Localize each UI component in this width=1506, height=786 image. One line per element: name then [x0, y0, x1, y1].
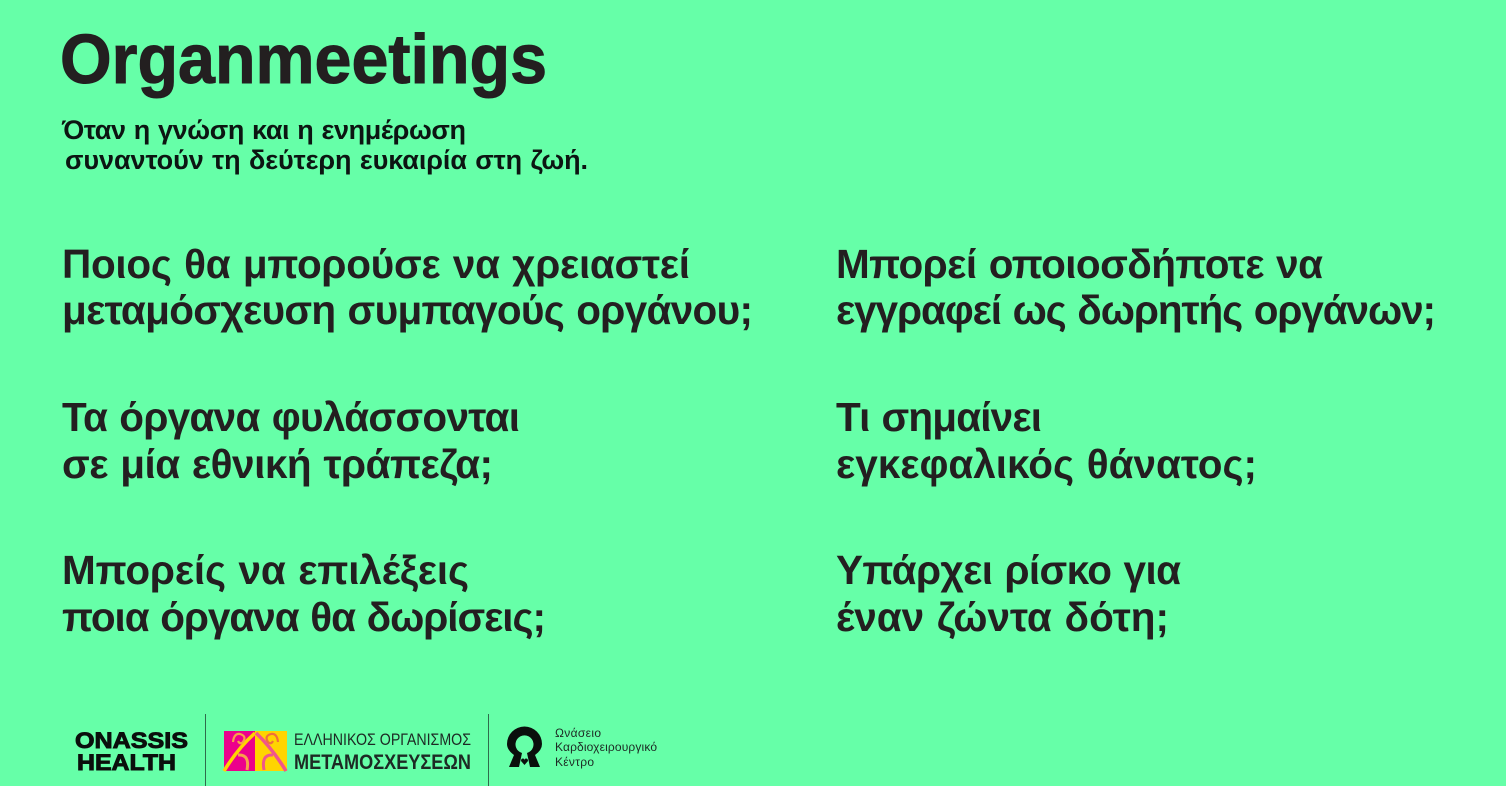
question: national bank: σε μία εθνική τράπεζα;: [62, 441, 493, 487]
question: national bank: Τα όργανα φυλάσσονται: [62, 394, 520, 440]
logo text: Onassis Cardiac Surgery Centre: Ωνάσειο: [555, 726, 601, 740]
divider 1: [205, 714, 206, 786]
question: solid organ transplant: [62, 241, 753, 333]
logo text: Greek transplant organisation: ΕΛΛΗΝΙΚΟΣ ΟΡΓΑΝΙΣΜΟΣ: [294, 731, 471, 749]
subtitle: συναντούν τη δεύτερη ευκαιρία στη ζωή.: [65, 145, 588, 175]
question: who can register: [836, 241, 1436, 333]
question: who can register: εγγραφεί ως δωρητής οργάνων;: [836, 287, 1436, 333]
question: living donor risk: [836, 547, 1181, 640]
subtitle: [61, 115, 588, 175]
divider 2: [488, 714, 489, 786]
logo: Onassis Health: [75, 728, 188, 775]
question: living donor risk: Υπάρχει ρίσκο για: [836, 547, 1181, 593]
logo text: Onassis Cardiac Surgery Centre: Καρδιοχειρουργικό: [555, 740, 657, 754]
question: national bank: [62, 394, 520, 487]
question: choosing organs: [62, 547, 546, 640]
title: Organmeetings: [60, 20, 547, 98]
logo: Onassis Health: ONASSIS: [75, 728, 188, 753]
question: brain death: Τι σημαίνει: [836, 394, 1042, 440]
question: choosing organs: ποια όργανα θα δωρίσεις;: [62, 594, 546, 640]
logo text: Greek transplant organisation: [294, 731, 471, 774]
footer logos: [75, 714, 657, 786]
logo text: Greek transplant organisation: ΜΕΤΑΜΟΣΧΕΥΣΕΩΝ: [294, 751, 471, 774]
logo text: Onassis Cardiac Surgery Centre: [555, 726, 657, 769]
logo: Greek transplant organisation emblem: [224, 731, 287, 771]
question: who can register: Μπορεί οποιοσδήποτε να: [836, 241, 1323, 287]
logo: Onassis Health: HEALTH: [77, 750, 176, 775]
question: solid organ transplant: μεταμόσχευση συμπαγούς οργάνου;: [62, 287, 753, 333]
subtitle: Όταν η γνώση και η ενημέρωση: [61, 115, 466, 145]
question: brain death: [836, 394, 1257, 487]
question: brain death: εγκεφαλικός θάνατος;: [836, 441, 1257, 487]
logo: Onassis Cardiac Surgery Centre icon: [507, 726, 542, 767]
question: choosing organs: Μπορείς να επιλέξεις: [62, 547, 469, 593]
question: solid organ transplant: Ποιος θα μπορούσε να χρειαστεί: [62, 241, 690, 287]
question: living donor risk: έναν ζώντα δότη;: [836, 594, 1169, 640]
logo text: Onassis Cardiac Surgery Centre: Κέντρο: [555, 755, 594, 769]
